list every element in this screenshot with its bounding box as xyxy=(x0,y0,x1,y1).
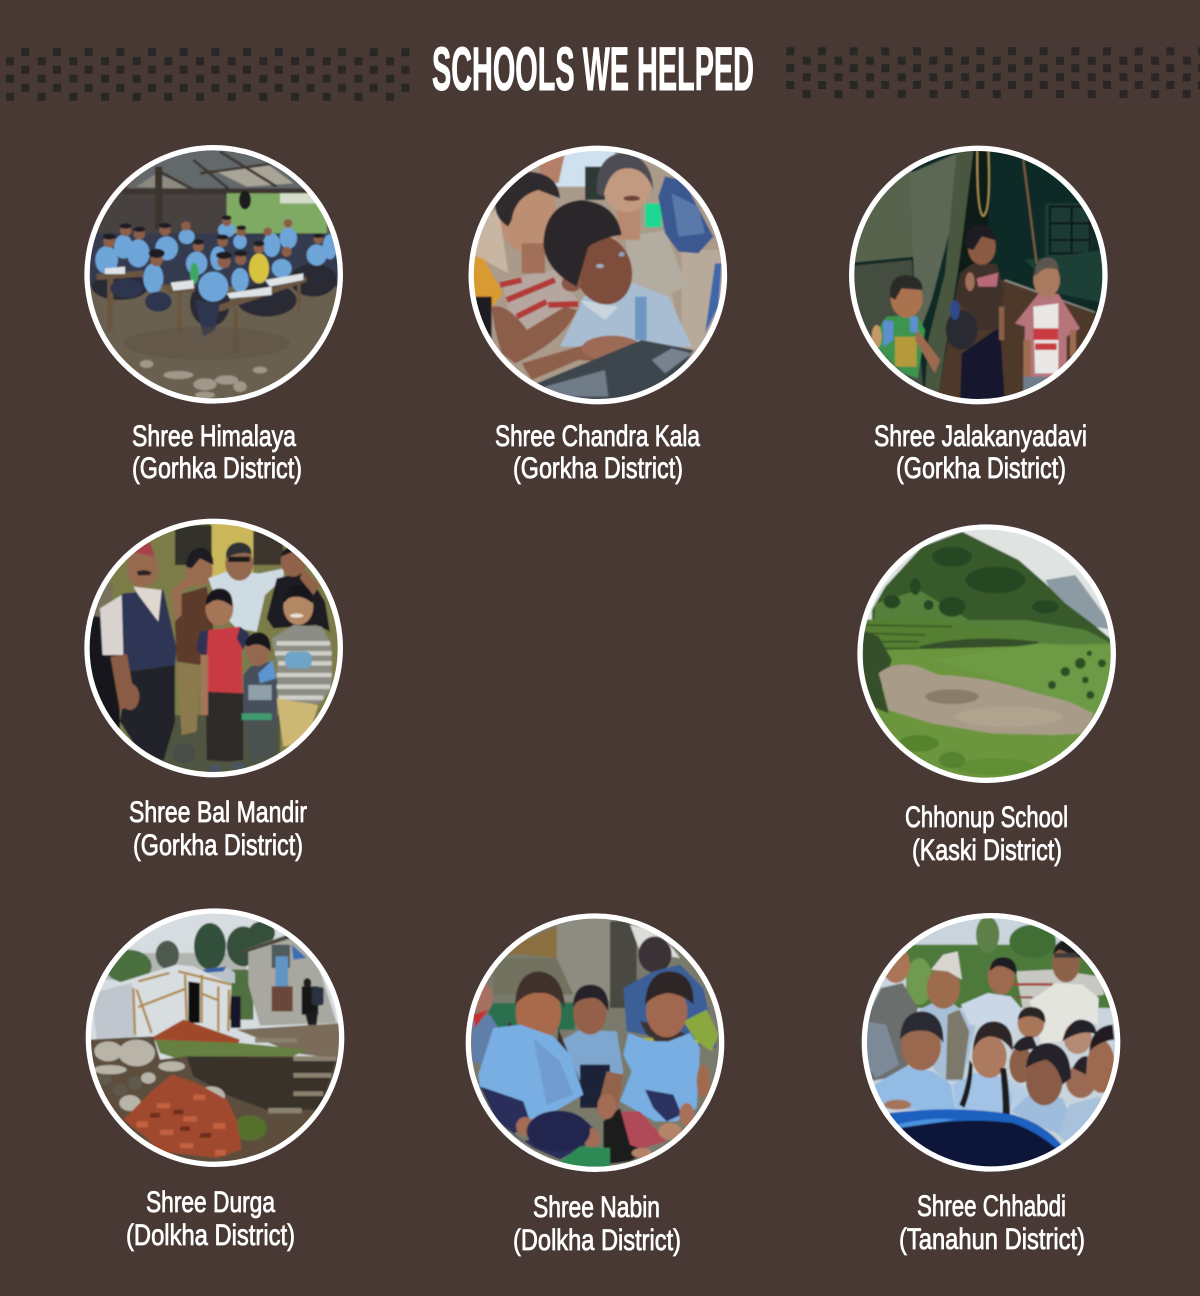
arms xyxy=(492,306,577,363)
label: Shree Durga xyxy=(146,1186,275,1219)
barrel xyxy=(537,340,693,400)
man left xyxy=(100,590,177,672)
label: Shree Chhabdi xyxy=(917,1190,1066,1223)
photo: tent shelter and rubble xyxy=(80,903,350,1173)
label xyxy=(126,1186,295,1252)
label xyxy=(899,1190,1085,1256)
label: Shree Bal Mandir xyxy=(129,796,307,829)
school: Shree Nabin xyxy=(460,908,730,1257)
photo: hillside landscape xyxy=(852,520,1122,790)
tent xyxy=(855,170,914,264)
left girl xyxy=(516,985,561,1041)
label: Shree Himalaya xyxy=(132,420,296,453)
label xyxy=(132,420,302,485)
back kids xyxy=(1018,1008,1044,1038)
barrel xyxy=(888,1110,1063,1171)
label: (Tanahun District) xyxy=(899,1223,1085,1256)
man center xyxy=(208,568,284,632)
label: (Gorkha District) xyxy=(133,829,303,862)
boy center xyxy=(960,327,1005,403)
heading band: SCHOOLS WE HELPED xyxy=(432,35,754,103)
rocks xyxy=(93,1040,225,1111)
back child xyxy=(638,936,672,973)
small boy xyxy=(243,662,277,722)
boy striped xyxy=(272,625,332,705)
boy brown xyxy=(175,587,213,665)
person with backpack xyxy=(302,986,318,1015)
boy left xyxy=(873,315,925,378)
label xyxy=(905,801,1068,867)
label: Shree Nabin xyxy=(533,1191,660,1224)
label: (Kaski District) xyxy=(912,834,1062,867)
brick pile top xyxy=(148,1020,240,1046)
heading band xyxy=(6,35,1200,103)
decorative dot pattern left xyxy=(6,52,410,97)
grass xyxy=(233,1115,267,1141)
center boy shirt xyxy=(560,283,692,347)
floor xyxy=(560,1146,610,1171)
right boy xyxy=(626,230,682,311)
label xyxy=(513,1191,681,1257)
boy front xyxy=(1011,1095,1068,1135)
photo: three boys xyxy=(465,140,735,410)
man right xyxy=(267,572,330,632)
label xyxy=(129,796,307,862)
tent xyxy=(120,964,233,1020)
label: Shree Chandra Kala xyxy=(495,420,700,453)
man center xyxy=(961,993,1021,1031)
label: (Dolkha District) xyxy=(126,1219,295,1252)
photo: uniformed children xyxy=(460,908,730,1178)
school: Chhonup School xyxy=(852,520,1122,867)
label xyxy=(874,420,1087,485)
photo: classroom xyxy=(80,140,350,410)
school: Shree Durga xyxy=(80,903,350,1252)
ground xyxy=(237,1023,343,1060)
boy right xyxy=(1015,294,1080,380)
school building xyxy=(240,935,337,1026)
label: (Dolkha District) xyxy=(513,1224,681,1257)
photo: students and teachers xyxy=(856,908,1126,1178)
school: Shree Himalaya xyxy=(80,140,350,485)
decorative dot pattern right xyxy=(786,51,1200,94)
brick pile xyxy=(123,1075,242,1158)
center boy xyxy=(560,1030,623,1108)
school: Shree Chandra Kala xyxy=(465,140,735,485)
boy red xyxy=(196,627,249,697)
boy far right xyxy=(1058,1096,1109,1148)
label: (Gorkha District) xyxy=(896,452,1066,485)
school: Shree Jalakanyadavi xyxy=(845,140,1115,485)
man far left xyxy=(866,983,918,1081)
boy left xyxy=(874,1066,956,1111)
school: Shree Bal Mandir xyxy=(80,515,350,862)
center boy head xyxy=(578,236,633,306)
girl xyxy=(953,1073,1013,1116)
man hat xyxy=(919,1001,976,1081)
photo: group portrait xyxy=(80,515,350,785)
label: (Gorhka District) xyxy=(132,452,302,485)
man right xyxy=(1029,983,1099,1043)
right girl xyxy=(640,1021,700,1068)
label xyxy=(495,420,700,485)
left edge child xyxy=(474,983,493,1013)
school: Shree Chhabdi xyxy=(856,908,1126,1256)
label: Chhonup School xyxy=(905,801,1068,834)
left boy xyxy=(502,270,580,330)
label: (Gorkha District) xyxy=(513,452,683,485)
label: Shree Jalakanyadavi xyxy=(874,420,1087,453)
photo: children at tent xyxy=(845,140,1115,410)
